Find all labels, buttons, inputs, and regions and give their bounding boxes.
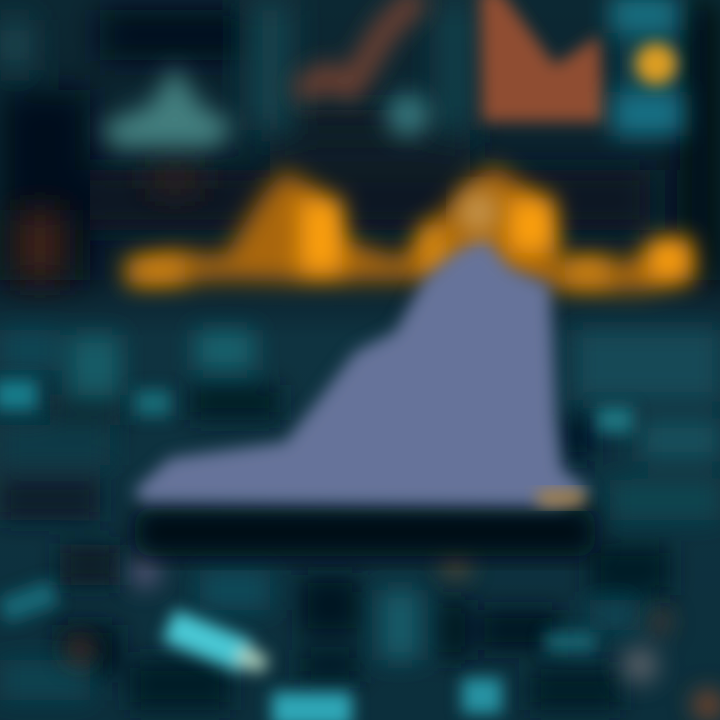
orange line chart band — [125, 165, 695, 292]
top dark background patches — [0, 0, 720, 280]
dim red bars at left — [15, 165, 200, 280]
shadow under area chart — [135, 508, 595, 556]
slate blue area chart — [135, 238, 590, 506]
orange accent at chart base — [538, 490, 584, 506]
small warm specks — [66, 552, 720, 720]
teal and yellow circular icon — [610, 0, 684, 136]
bright orange highlights — [130, 198, 688, 284]
orange peak overlapping area chart — [458, 190, 498, 234]
rust triangle — [480, 0, 605, 122]
bright cyan tiles — [0, 380, 633, 720]
pale teal star cluster — [100, 65, 430, 148]
lower teal mosaic background — [0, 330, 720, 710]
brown line chart — [298, 0, 420, 95]
